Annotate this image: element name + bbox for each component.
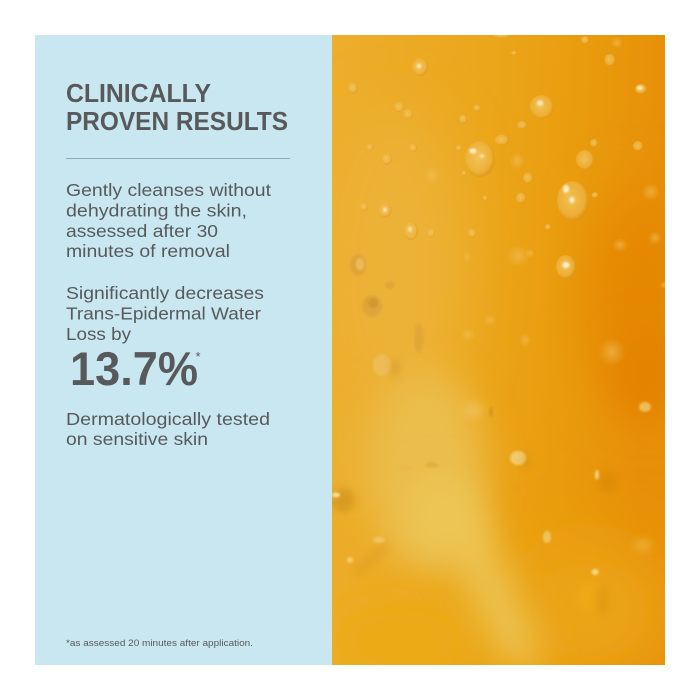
panel: text background: [35, 35, 332, 665]
text block: cleansing claim: dehydrating the skin,: [66, 200, 247, 220]
text block: cleansing claim: Gently cleanses without: [66, 180, 271, 200]
panel: golden gel texture photo: [332, 35, 665, 665]
text block: water loss claim: [66, 283, 264, 344]
text block: water loss claim: Significantly decreases: [66, 283, 264, 303]
text block: water loss claim: Trans-Epidermal Water: [66, 304, 261, 324]
text block: cleansing claim: minutes of removal: [66, 241, 230, 261]
text block: dermatologically tested: Dermatologically tested: [66, 409, 270, 429]
statistic: 13.7%: 13.7%: [70, 342, 198, 395]
statistic: 13.7%: *: [196, 349, 201, 364]
text block: dermatologically tested: on sensitive skin: [66, 429, 208, 449]
bubble highlights: [384, 64, 643, 268]
heading: [66, 78, 288, 136]
heading: PROVEN RESULTS: [66, 106, 288, 136]
text block: cleansing claim: assessed after 30: [66, 221, 218, 241]
bubbles: [348, 32, 668, 366]
large drops: [331, 254, 652, 615]
heading: CLINICALLY: [66, 78, 211, 108]
text block: water loss claim: Loss by: [66, 324, 131, 344]
footnote: *as assessed 20 minutes after application.: [66, 638, 253, 648]
text block: dermatologically tested: [66, 409, 270, 449]
text block: cleansing claim: [66, 180, 271, 261]
gel colour washes: [330, 110, 460, 430]
